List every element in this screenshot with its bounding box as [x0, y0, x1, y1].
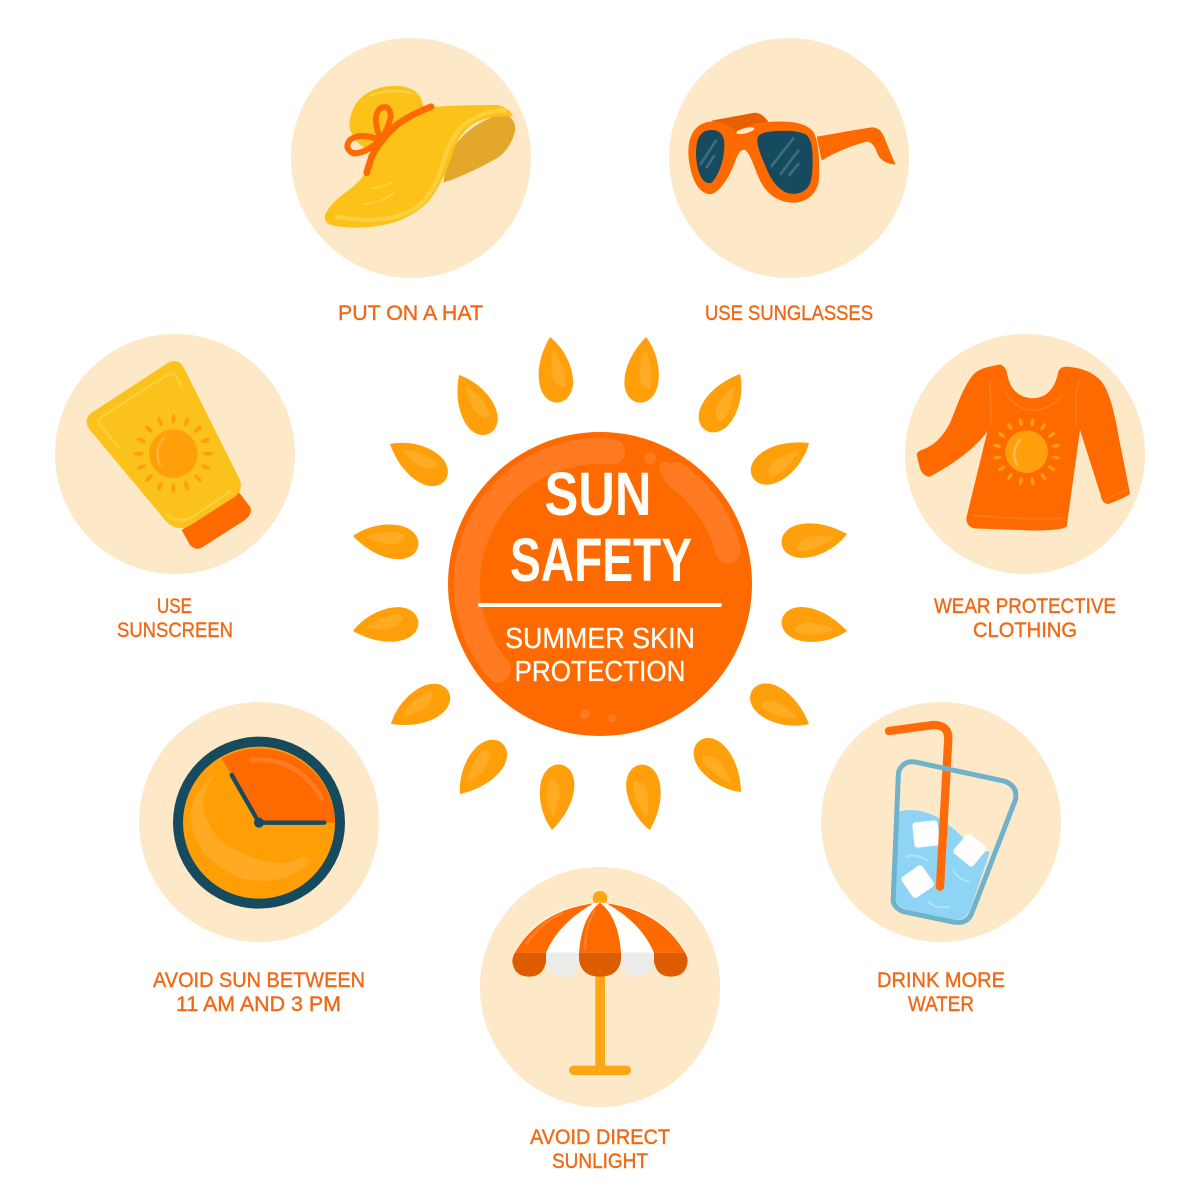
label: avoid sun between 11 am and 3 pm: AVOID SUN BETWEEN [153, 969, 365, 992]
icon: sunscreen tube [87, 361, 251, 549]
label: avoid direct sunlight: SUNLIGHT [552, 1150, 648, 1173]
label: wear protective clothing [934, 595, 1116, 642]
label: avoid direct sunlight: AVOID DIRECT [530, 1126, 670, 1149]
label: avoid sun between 11 am and 3 pm: 11 AM AND 3 PM [176, 993, 341, 1016]
label: avoid direct sunlight [530, 1126, 670, 1173]
title: SUN [544, 460, 652, 528]
label: use sunglasses: USE SUNGLASSES [705, 302, 873, 325]
label: drink more water: DRINK MORE [877, 969, 1005, 992]
subtitle [505, 623, 695, 688]
sun rays [350, 335, 850, 833]
label: use sunscreen: USE [157, 595, 192, 618]
subtitle: PROTECTION [514, 656, 686, 688]
subtitle: SUMMER SKIN [505, 623, 695, 655]
panel: use sunglasses [669, 38, 909, 325]
panel: wear protective clothing [905, 334, 1145, 642]
sun title badge [448, 432, 752, 736]
panel: drink more water [821, 702, 1061, 1016]
title: SAFETY [510, 526, 692, 594]
panel: avoid direct sunlight [480, 867, 720, 1173]
label: use sunscreen [117, 595, 233, 642]
icon: beach umbrella [512, 891, 688, 1075]
icon: hat [325, 86, 515, 228]
title [510, 460, 692, 594]
panel: use sunscreen [55, 334, 295, 642]
label: avoid sun between 11 am and 3 pm [153, 969, 365, 1016]
label: drink more water [877, 969, 1005, 1016]
label: wear protective clothing: WEAR PROTECTIVE [934, 595, 1116, 618]
label: use sunscreen: SUNSCREEN [117, 619, 233, 642]
panel: avoid sun between 11 am and 3 pm [139, 702, 379, 1016]
icon: glass of water [889, 725, 1016, 922]
icon: sunglasses [688, 113, 896, 203]
icon: clock [173, 737, 345, 909]
label: drink more water: WATER [908, 993, 974, 1016]
label: wear protective clothing: CLOTHING [973, 619, 1077, 642]
panel: put on a hat [291, 38, 531, 325]
icon: shirt [917, 364, 1130, 531]
label: put on a hat: PUT ON A HAT [338, 302, 483, 325]
